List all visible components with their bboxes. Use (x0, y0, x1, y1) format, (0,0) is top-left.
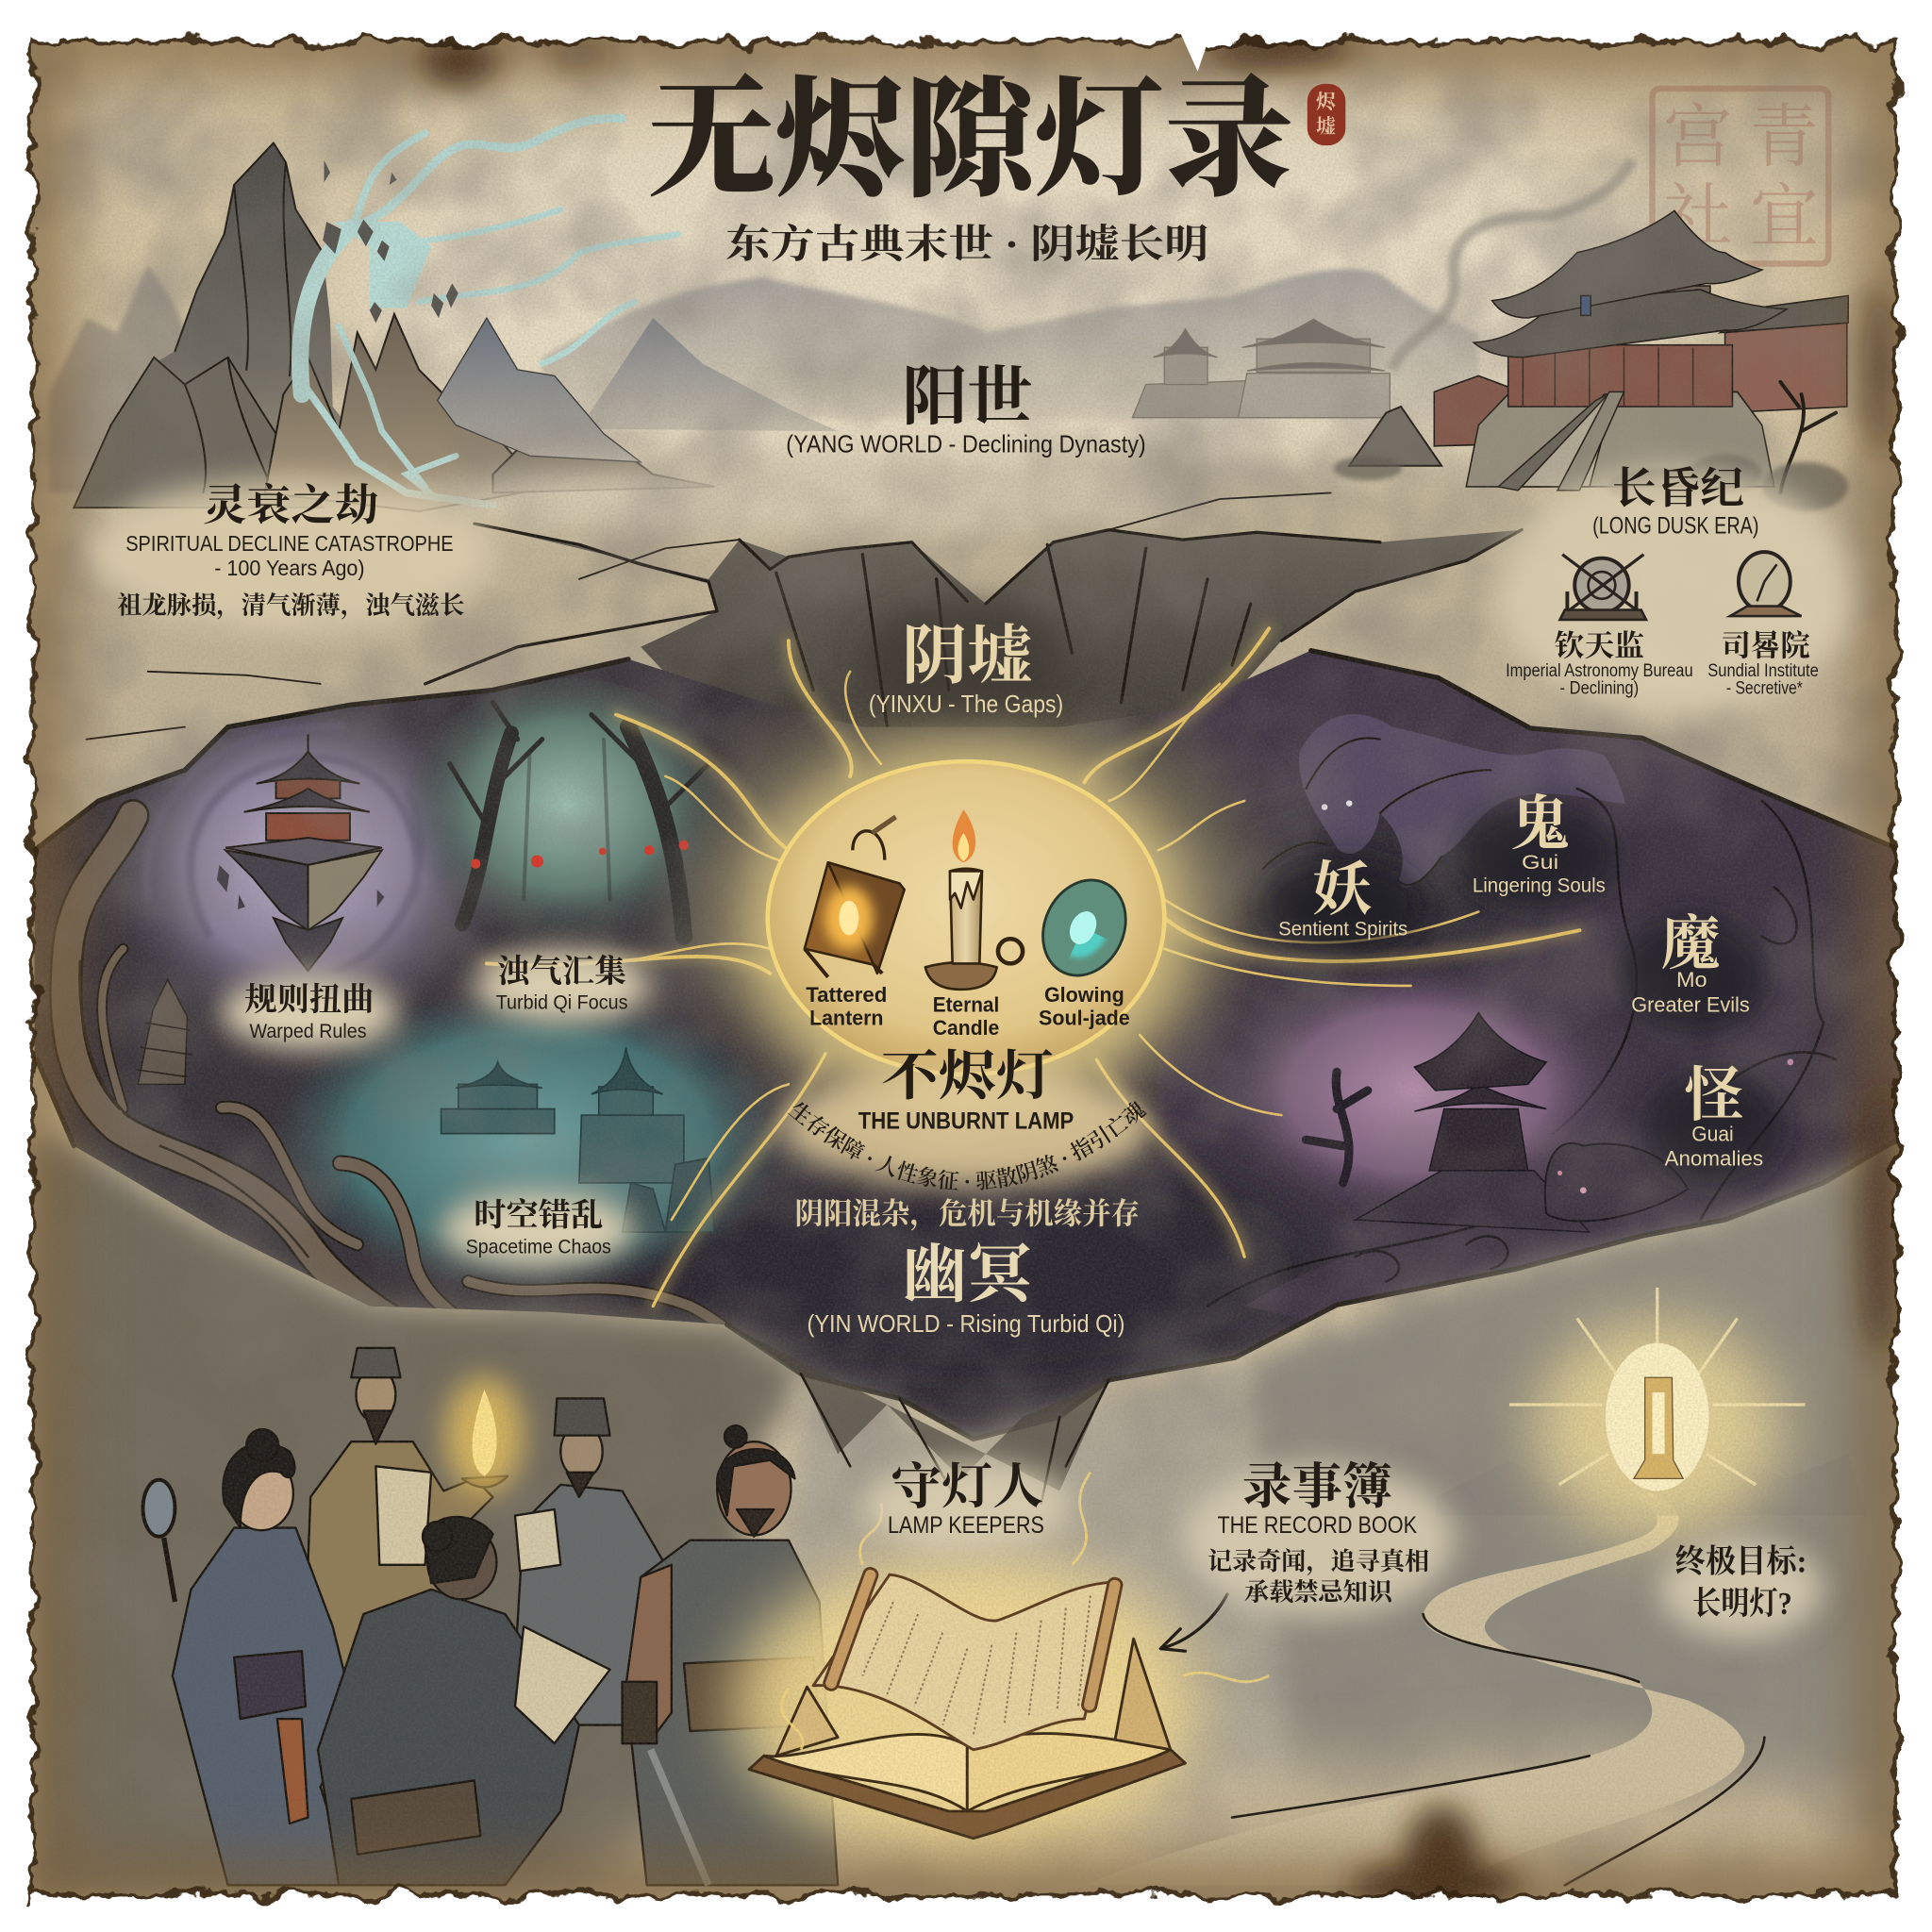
pink ruin glow (1201, 955, 1633, 1226)
label: spacetime chaos: 时空错乱 (474, 1198, 603, 1234)
man's belt (351, 1780, 480, 1855)
lower light strip (555, 1750, 1904, 1904)
large faded seal: 宫 (1663, 99, 1732, 175)
palace stairs (1522, 394, 1614, 487)
warrior bracer (623, 1682, 657, 1743)
label: record book (1183, 1459, 1454, 1617)
subheading: the unburnt lamp: THE UNBURNT LAMP (858, 1108, 1074, 1134)
label: guai (1646, 1062, 1782, 1184)
lurking beast (1545, 1143, 1688, 1221)
open scroll (813, 1567, 1123, 1750)
flame bowl (462, 1476, 508, 1488)
mountain: blue peak (438, 318, 641, 462)
label: yao: 妖 (1312, 857, 1372, 923)
panel: orb of the unburnt lamp (702, 708, 1233, 1209)
scholar (302, 1348, 508, 1725)
label: eternal candle (933, 992, 999, 1040)
label: glowing soul-jade: Soul-jade (1039, 1007, 1130, 1030)
label: glowing soul-jade: Glowing (1044, 983, 1124, 1007)
scroll writing (862, 1595, 1091, 1735)
label: spacetime chaos: Spacetime Chaos (466, 1236, 611, 1257)
mountain: main peak (74, 143, 413, 508)
cave base dark (34, 651, 1309, 1437)
flame (473, 1390, 497, 1476)
label: warped rules (221, 975, 398, 1050)
heading: yinxu: 阴墟 (902, 620, 1033, 691)
red seal: 烬 (1315, 91, 1336, 113)
heading: youming: 幽冥 (902, 1239, 1033, 1310)
floating debris (217, 865, 385, 909)
label: glowing soul-jade (1039, 983, 1130, 1030)
teal city (441, 1047, 715, 1232)
large faded seal (1653, 89, 1828, 264)
icon: tattered lantern (805, 817, 905, 977)
held paper (515, 1626, 610, 1743)
label: imperial astronomy bureau: - Declining) (1560, 678, 1639, 698)
heading: yang world: 阳世 (902, 361, 1033, 433)
label: imperial astronomy bureau: Imperial Astronomy Bureau (1506, 661, 1693, 681)
main palace (1434, 210, 1848, 491)
heading: youming (808, 1239, 1124, 1338)
label: gui (1460, 791, 1621, 908)
flame glow (445, 1376, 524, 1494)
gold veins (487, 628, 1579, 1306)
callout: spiritual decline: 祖龙脉损，清气渐薄，浊气滋长 (117, 591, 464, 620)
distant hill (579, 318, 838, 431)
label: gui: 鬼 (1510, 791, 1570, 858)
open book (749, 1639, 1185, 1839)
gnarled tree roots (66, 816, 764, 1368)
label: lamp keepers: LAMP KEEPERS (888, 1513, 1044, 1539)
swirling shadow body (1244, 752, 1904, 1324)
paper notch (1176, 25, 1214, 72)
icon: eternal candle (925, 809, 1023, 990)
heading: yinxu: (YINXU - The Gaps) (869, 690, 1063, 718)
chasm: cracked earth (86, 492, 1522, 752)
label: yao (1263, 857, 1424, 953)
heading: yang world: (YANG WORLD - Declining Dynasty) (786, 429, 1146, 458)
label: guai: Guai (1691, 1122, 1734, 1145)
forest trees (450, 702, 708, 937)
label: record book: 录事簿 (1242, 1459, 1392, 1514)
panel: yinxu cavern (34, 651, 1904, 1437)
orb halo (740, 741, 1195, 1111)
arc text: lamp functions: 生存保障 · 人性象征 · 驱散阴煞 · 指引亡魂 (788, 1102, 1147, 1191)
warrior belt (684, 1657, 820, 1731)
label: eternal candle: Eternal (933, 992, 999, 1016)
label: turbid qi focus: 浊气汇集 (497, 954, 626, 990)
hand mirror (143, 1480, 175, 1537)
heading: yang world (786, 361, 1146, 458)
center dark (597, 1134, 1337, 1405)
ground band (25, 473, 1923, 887)
ruined roof (1349, 407, 1441, 466)
ghost beast (1263, 714, 1657, 888)
icon: armillary (1560, 555, 1646, 620)
smoke (1392, 160, 1633, 370)
heading: youming: (YIN WORLD - Rising Turbid Qi) (808, 1309, 1124, 1338)
label: sundial institute: Sundial Institute (1707, 661, 1819, 681)
subtitle: 东方古典末世 · 阴墟长明 (725, 223, 1208, 267)
man from behind (318, 1517, 610, 1885)
label: tattered lantern (806, 983, 887, 1030)
arrow (1160, 1594, 1227, 1651)
red seal: 墟 (1316, 115, 1336, 138)
panel: lamp keepers figures (143, 1348, 838, 1885)
label: sundial institute: 司晷院 (1722, 629, 1810, 662)
panel: long dusk era: (LONG DUSK ERA) (1592, 514, 1758, 540)
spirit flow: cyan qi (300, 118, 677, 506)
warrior sword (651, 1750, 708, 1885)
icon: glowing soul-jade (1027, 866, 1141, 990)
fog (407, 464, 1195, 534)
ground mottling (0, 492, 1932, 862)
label: mo: Greater Evils (1631, 992, 1750, 1016)
label: guai: 怪 (1684, 1062, 1743, 1128)
woman with mirror (143, 1429, 358, 1885)
panel: yang world scenery (0, 61, 1932, 887)
label: ultimate goal (1659, 1541, 1823, 1639)
palace red hall (1508, 345, 1732, 407)
label: warped rules: 规则扭曲 (244, 982, 374, 1018)
panel: long dusk era (1497, 464, 1855, 715)
golden wisps (781, 1473, 1269, 1750)
label: gui: Gui (1522, 852, 1558, 874)
palace lower roof (1474, 290, 1787, 358)
ruined dark palace (1356, 1013, 1590, 1232)
dead tree (1780, 382, 1836, 492)
label: record book: 记录奇闻，追寻真相 (1208, 1548, 1429, 1576)
ground crack left (86, 492, 1331, 740)
lamp rays (1509, 1288, 1805, 1485)
label: imperial astronomy bureau: 钦天监 (1555, 629, 1644, 662)
far palace (1132, 319, 1390, 418)
red seal (1307, 84, 1345, 145)
palace upper floor (1538, 286, 1710, 325)
panel: record book (733, 1473, 1269, 1860)
label: spacetime chaos (442, 1192, 635, 1267)
far crags (1436, 1454, 1867, 1516)
forest glow (400, 677, 733, 961)
label: record book: 承载禁忌知识 (1244, 1578, 1395, 1607)
label: turbid qi focus: Turbid Qi Focus (496, 992, 627, 1014)
veins soft glow (487, 628, 1579, 1306)
callout: spiritual decline: 灵衰之劫 (203, 481, 379, 529)
sash (234, 1651, 306, 1719)
palace plaque (1581, 295, 1591, 315)
orb disc (768, 761, 1164, 1074)
teal city glow (271, 986, 789, 1293)
lower left ground (31, 1134, 801, 1897)
label: sundial institute (1707, 629, 1819, 698)
vortex swirls (147, 726, 421, 974)
scroll in scholar's hand (375, 1466, 431, 1565)
falling rocks (323, 160, 458, 323)
label: tattered lantern: Lantern (809, 1007, 883, 1030)
burn marks (419, 32, 1899, 1916)
palace top roof (1492, 210, 1762, 318)
lower center (764, 1361, 1306, 1897)
label: ultimate goal: 长明灯? (1692, 1586, 1792, 1622)
label: eternal candle: Candle (933, 1016, 999, 1040)
cave base drips (727, 1324, 1109, 1491)
distant mountains right (542, 269, 1478, 419)
label: lamp keepers (862, 1459, 1072, 1550)
sky haze (321, 61, 1700, 530)
callout: spiritual decline: - 100 Years Ago) (214, 556, 365, 580)
label: mo: Mo (1676, 968, 1707, 991)
callout: spiritual decline: SPIRITUAL DECLINE CATASTROPHE (125, 531, 454, 556)
label: warped rules: Warped Rules (249, 1021, 367, 1042)
text: yin yang mix: 阴阳混杂，危机与机缘并存 (794, 1197, 1140, 1231)
title: 无烬隙灯录 (646, 69, 1293, 213)
vortex (92, 677, 511, 1047)
left far mountain (49, 265, 197, 492)
label: record book: THE RECORD BOOK (1217, 1513, 1417, 1539)
chasm wall (475, 524, 1522, 752)
palace platform (1466, 391, 1774, 487)
palace side wings (1434, 375, 1528, 446)
crack lines (425, 524, 1522, 727)
road (1084, 1493, 1744, 1885)
large faded seal: 宜 (1750, 179, 1819, 256)
label: mo (1618, 910, 1766, 1033)
heading: yinxu (862, 597, 1072, 721)
book glow (733, 1553, 1201, 1860)
label: ultimate goal: 终极目标: (1675, 1544, 1807, 1580)
mist mottling (0, 1331, 1932, 1885)
mountain: brown foothills (265, 314, 715, 511)
grey man (511, 1398, 665, 1725)
label: gui: Lingering Souls (1473, 875, 1606, 897)
heading: unburnt lamp: 不烬灯 (881, 1047, 1054, 1107)
panel: long dusk era: 长昏纪 (1612, 464, 1744, 512)
large faded seal: 社 (1663, 179, 1732, 256)
warm haze around orb (672, 677, 1263, 1096)
lamp tower glow (1509, 1288, 1805, 1541)
cave outline (35, 651, 1904, 1440)
label: tattered lantern: Tattered (806, 983, 887, 1007)
label: sundial institute: - Secretive* (1726, 678, 1803, 698)
right side purple (1158, 641, 1923, 1331)
shrubs (1333, 455, 1848, 511)
dark behind spirit (1208, 813, 1528, 986)
label: turbid qi focus (474, 949, 651, 1023)
shadow tendrils (1208, 789, 1836, 1306)
lower right mist (1232, 1140, 1904, 1897)
tilted pagoda (136, 979, 192, 1084)
dead tree in ruins (1306, 1072, 1368, 1183)
red eyes (471, 841, 689, 869)
large faded seal: 青 (1750, 99, 1819, 175)
lower glow under orb for the arc text (782, 1068, 1152, 1187)
label: yao: Sentient Spirits (1278, 918, 1407, 940)
icon: sundial (1730, 552, 1802, 616)
callout: spiritual decline (89, 478, 495, 631)
warrior (623, 1425, 838, 1885)
panel: lower lands (0, 1134, 1932, 1904)
floating pagoda (225, 734, 382, 971)
label: mo: 魔 (1661, 910, 1720, 976)
label: imperial astronomy bureau (1506, 629, 1693, 698)
label: lamp keepers: 守灯人 (891, 1459, 1043, 1514)
label: guai: Anomalies (1665, 1147, 1763, 1171)
